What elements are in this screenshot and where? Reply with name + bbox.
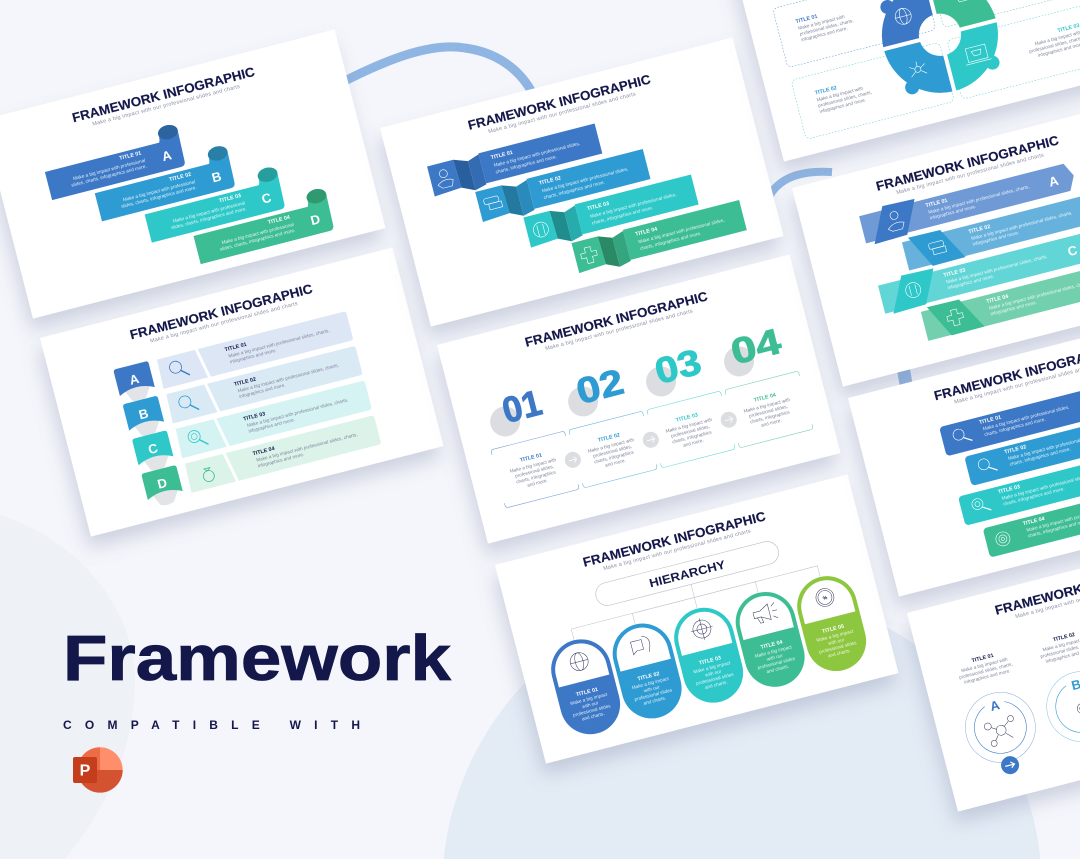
pill 1: TITLE 01 <box>575 687 599 698</box>
step 3: professional slides, <box>670 424 710 439</box>
folded bar 1: TITLE 01 <box>490 150 514 161</box>
circle quadrants <box>869 0 1011 105</box>
step 1: and more. <box>527 478 548 488</box>
band C <box>877 228 1080 316</box>
ribbon B <box>91 144 237 221</box>
row A: Make a big impact with professional slides, charts, <box>228 328 330 359</box>
band D: TITLE 04 <box>986 294 1009 305</box>
pill 3: TITLE 03 <box>699 655 722 667</box>
row D: TITLE 04 <box>252 446 275 457</box>
folded bar 2 <box>475 149 651 226</box>
folded bar 4: Make a big impact with professional slides, <box>638 217 725 244</box>
step 4: and more. <box>761 418 782 428</box>
row B <box>123 345 364 440</box>
card text 1: Make a big impact with <box>798 14 845 31</box>
step 2: 02 <box>572 361 628 412</box>
row B: TITLE 02 <box>233 377 257 388</box>
pill 1: and charts. <box>581 711 605 722</box>
pill 2: TITLE 02 <box>637 671 660 683</box>
background blob: right circle <box>444 590 1040 859</box>
step 4: TITLE 04 <box>753 392 777 404</box>
panel: circles slide <box>907 522 1080 812</box>
pill 4 <box>729 585 811 693</box>
folded bar 3: charts, infographics and more. <box>591 205 654 226</box>
step 2: Make a big impact with <box>587 437 635 454</box>
row C: infographics and more. <box>248 417 295 434</box>
bar 2: TITLE 02 <box>1004 444 1027 456</box>
folded bar 3: Make a big impact with professional slides, <box>590 192 677 219</box>
panel: rounded bars slide <box>848 307 1080 597</box>
pill 3: with our <box>705 669 722 678</box>
band A: infographics and more. <box>929 204 977 221</box>
ribbon C: Make a big impact with professional <box>172 200 245 224</box>
step 3: charts, infographics <box>672 429 713 444</box>
band C: infographics and more. <box>947 274 995 290</box>
step 1: Make a big impact with <box>509 457 557 474</box>
step 2 <box>555 358 657 488</box>
step 1 <box>477 378 579 508</box>
folded bar 2: Make a big impact with professional slides, <box>541 166 629 193</box>
band B: TITLE 02 <box>968 224 991 235</box>
band D <box>920 250 1080 341</box>
row B: infographics and more. <box>239 382 286 399</box>
main title: Framework <box>63 622 451 694</box>
heading: FRAMEWORK INFOGRAPHIC <box>70 64 257 125</box>
band B <box>901 181 1080 272</box>
panel: table slide <box>40 247 444 537</box>
pill 5: % <box>822 595 829 602</box>
ribbon A <box>41 123 187 200</box>
card text 1: TITLE 01 <box>795 14 818 25</box>
pill 3: professional slides <box>695 672 735 686</box>
folded bar 1: charts, infographics and more. <box>495 154 557 175</box>
row A: infographics and more. <box>229 348 277 364</box>
card text 2: Make a big impact with <box>816 86 864 102</box>
bar 2: charts, infographics and more. <box>1009 446 1071 467</box>
step 4: professional slides, <box>748 404 788 419</box>
bar 1 <box>939 390 1080 456</box>
pill 3 <box>668 601 750 709</box>
heading: FRAMEWORK INFOGRAPHIC <box>523 288 710 350</box>
card text 1: professional slides, charts, <box>799 18 854 37</box>
connector curve: top <box>335 47 534 96</box>
card text 1 <box>795 5 855 43</box>
ribbon C: C <box>260 190 273 207</box>
ribbon D <box>190 187 335 264</box>
panel: ribbon slide <box>0 29 386 319</box>
row C: Make a big impact with professional slides, charts, <box>246 397 349 428</box>
band C: Make a big impact with professional slides, charts, <box>946 254 1048 285</box>
row B: Make a big impact with professional slides, charts, <box>237 363 339 393</box>
row D: D <box>156 475 169 492</box>
column A: professional slides, charts, <box>958 661 1013 680</box>
step 1: professional slides, <box>515 464 554 479</box>
step 3: 03 <box>650 341 705 392</box>
row C: TITLE 03 <box>243 411 266 423</box>
band B: infographics and more. <box>972 230 1019 247</box>
row C: C <box>146 440 160 457</box>
heading: FRAMEWORK INFOGRAPHIC <box>128 281 315 342</box>
column A <box>948 647 1046 783</box>
bar 4: TITLE 04 <box>1022 516 1045 527</box>
ribbon A: A <box>160 147 174 164</box>
card text 3 <box>1025 23 1080 60</box>
step 2: TITLE 02 <box>597 432 621 444</box>
panel: hierarchy slide <box>495 474 899 764</box>
subheading: Make a big impact with our professional slides and charts <box>150 301 299 345</box>
pill 2: and charts. <box>643 695 667 706</box>
hierarchy box: HIERARCHY <box>648 557 727 590</box>
ribbon D: D <box>309 211 322 228</box>
ribbon D: slides, charts, infographics and more. <box>219 228 296 252</box>
ribbon C <box>141 165 286 243</box>
heading: FRAMEWORK INFOGRAPHIC <box>874 132 1061 194</box>
pill 2: professional slides <box>634 687 673 702</box>
folded bar 4: charts, infographics and more. <box>639 231 702 251</box>
ribbon A: Make a big impact with professional <box>73 158 146 181</box>
row C <box>132 379 373 474</box>
folded bar 1: Make a big impact with professional slides, <box>493 141 581 168</box>
pill 2: with our <box>643 684 661 693</box>
ribbon D: TITLE 04 <box>267 215 291 226</box>
band A <box>858 158 1078 246</box>
column B: TITLE 02 <box>1052 632 1076 643</box>
row D: Make a big impact with professional slides, charts, <box>256 432 358 463</box>
step 1: TITLE 01 <box>519 452 543 464</box>
dashed cards <box>773 0 1080 139</box>
ribbon C: TITLE 03 <box>219 193 242 204</box>
arrow 1 <box>563 450 583 470</box>
subheading: Make a big impact with our professional slides and charts <box>92 84 241 128</box>
bar 1: TITLE 01 <box>979 415 1002 426</box>
background blob: left circle <box>0 515 135 859</box>
ribbon D: Make a big impact with professional <box>221 222 294 245</box>
pill 1 <box>545 633 627 741</box>
ribbon B: B <box>210 169 223 185</box>
pill 3: and charts. <box>704 679 728 690</box>
connector lines <box>568 553 820 640</box>
row D: infographics and more. <box>257 452 305 468</box>
band C: TITLE 03 <box>943 268 966 279</box>
card text 2 <box>814 77 874 114</box>
card text 2: infographics and more. <box>819 97 866 114</box>
step 4 <box>711 318 813 448</box>
bar 3: charts, infographics and more. <box>1003 486 1065 507</box>
folded bar 4 <box>572 200 748 277</box>
band A: TITLE 01 <box>925 198 948 209</box>
column A: A <box>988 697 1002 714</box>
pill 5: professional slides <box>818 640 858 655</box>
arrow 3 <box>719 410 739 430</box>
pill 4: TITLE 04 <box>760 640 783 651</box>
card text 2: professional slides, charts, <box>818 90 872 108</box>
connector curve: middle <box>770 172 832 195</box>
band C: C <box>1066 242 1079 259</box>
step 3 <box>633 338 735 468</box>
step 1: 01 <box>498 382 546 431</box>
column A: infographics and more. <box>964 668 1011 685</box>
step 3: Make a big impact with <box>665 417 713 434</box>
pill 1: Make a big impact <box>570 692 608 706</box>
bar 1: charts, infographics and more. <box>984 417 1046 437</box>
bar 3 <box>958 442 1080 526</box>
pill 5 <box>791 570 873 678</box>
step 4: charts, infographics <box>750 409 791 424</box>
panel: folded bars slide <box>380 37 784 327</box>
panel: circle quadrant slide <box>733 0 1080 162</box>
pill 2 <box>606 617 688 725</box>
ribbon B: Make a big impact with professional <box>122 179 196 202</box>
row A: A <box>128 371 141 388</box>
subheading: Make a big impact with our professional slides and charts <box>545 308 694 352</box>
heading: FRAMEWORK INFOGRAPHIC <box>466 71 653 133</box>
pill 3: Make a big impact <box>693 660 731 674</box>
bar 4 <box>983 474 1080 558</box>
ribbon B: TITLE 02 <box>169 172 192 183</box>
row A: TITLE 01 <box>224 342 247 353</box>
folded bar 4: TITLE 04 <box>635 226 658 238</box>
subheading: Make a big impact with our professional slides and charts <box>603 528 752 572</box>
pill 4: and charts. <box>766 664 790 674</box>
connector curve: lower <box>901 355 907 390</box>
band D: infographics and more. <box>990 300 1037 316</box>
icon: PowerPoint logo: P <box>80 762 91 780</box>
pill 5: TITLE 05 <box>822 624 845 635</box>
bar 1: Make a big impact with professional slides, <box>982 404 1070 431</box>
hierarchy box <box>593 539 781 608</box>
band A: Make a big impact with professional slides, charts, <box>928 184 1030 215</box>
pill 5: Make a big impact <box>816 628 854 643</box>
arrow 2 <box>641 430 661 450</box>
folded bar 3 <box>523 175 700 251</box>
pill 2: Make a big impact <box>631 676 670 690</box>
card text 3: TITLE 03 <box>1057 23 1080 34</box>
ribbon B: slides, charts, infographics and more. <box>121 185 197 209</box>
step 3: and more. <box>683 438 704 448</box>
column A: Make a big impact with <box>961 656 1008 673</box>
pill 4: with our <box>766 653 784 662</box>
bar 2 <box>964 402 1080 486</box>
pill 4: professional slides <box>757 656 796 670</box>
pill 4: Make a big impact <box>754 644 793 659</box>
row A <box>113 310 355 405</box>
folded bar 2: TITLE 02 <box>538 175 562 187</box>
step 2: charts, infographics <box>594 449 635 464</box>
column A: TITLE 01 <box>971 653 994 664</box>
subheading: Make a big impact with our professional slides and charts <box>488 91 637 135</box>
step 2: and more. <box>605 458 626 468</box>
column B <box>1029 626 1080 762</box>
ribbon A: slides, charts, infographics and more. <box>71 164 147 188</box>
heading: FRAMEWORK INFOGRAPHIC <box>581 508 768 570</box>
step 3: TITLE 03 <box>675 412 699 424</box>
ribbon C: slides, charts, infographics and more. <box>170 206 247 230</box>
pill 5: and charts. <box>827 648 851 658</box>
step 1: charts, infographics <box>516 469 557 485</box>
card text 2: TITLE 02 <box>814 85 838 97</box>
row B: B <box>137 406 150 422</box>
subtitle: compatible with: COMPATIBLE WITH <box>63 718 360 732</box>
folded bar 3: TITLE 03 <box>587 201 610 212</box>
folded bar 2: charts, infographics and more. <box>543 180 605 200</box>
step 4: Make a big impact with <box>743 397 791 414</box>
band B: Make a big impact with professional slides, charts, <box>971 210 1073 241</box>
folded bar 1 <box>427 123 603 200</box>
row D <box>141 414 383 509</box>
panel: numbered steps slide <box>437 254 841 544</box>
panel: angled ribbons slide <box>792 97 1080 387</box>
icon: PowerPoint logo <box>73 747 123 793</box>
bar 3: TITLE 03 <box>998 484 1021 496</box>
pill 1: professional slides <box>572 703 612 718</box>
pill 1: with our <box>582 700 599 709</box>
step 2: professional slides, <box>592 444 632 459</box>
subheading: Make a big impact with our professional slides and charts <box>896 152 1045 196</box>
step 4: 04 <box>727 320 785 372</box>
band A: A <box>1047 173 1061 190</box>
ribbon A: TITLE 01 <box>119 151 142 162</box>
pill 5: with our <box>828 637 845 646</box>
card text 1: infographics and more. <box>801 26 848 42</box>
